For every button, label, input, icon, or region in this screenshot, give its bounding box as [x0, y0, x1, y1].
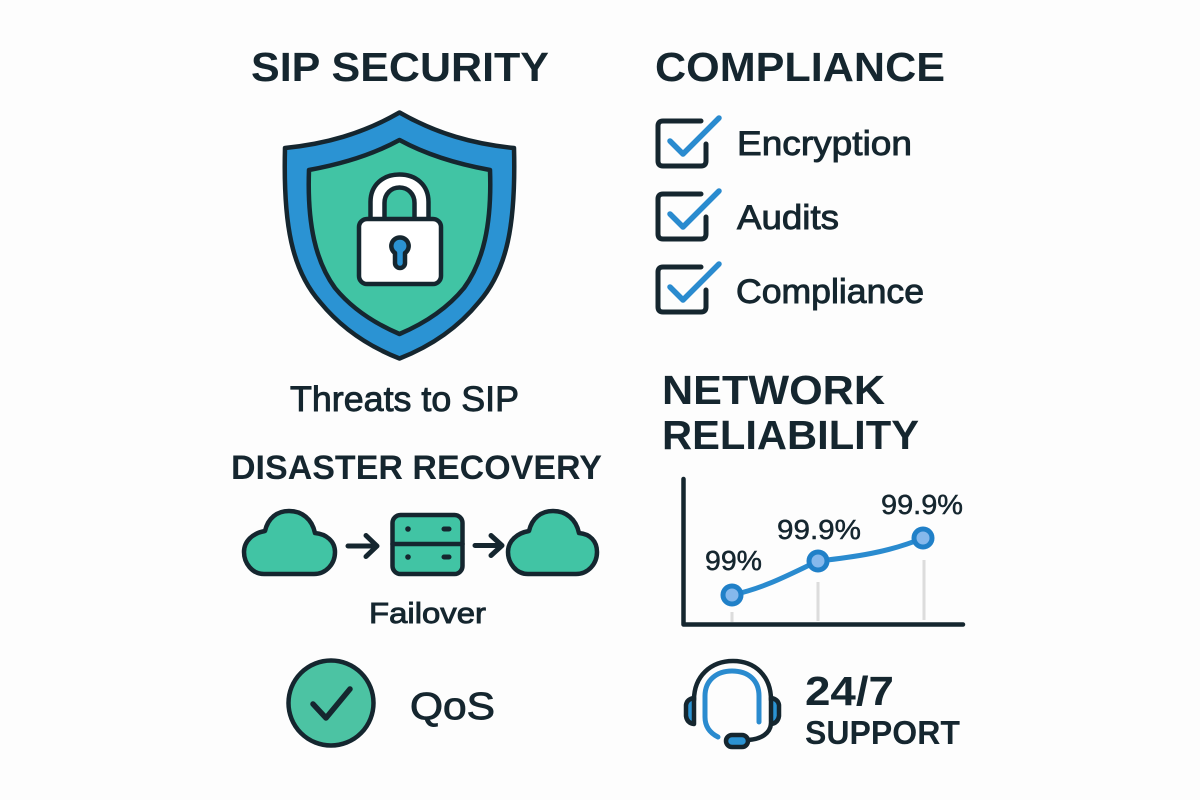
line chart: uptime: 99.9% — [881, 489, 963, 520]
panel: disaster recovery — [231, 449, 602, 630]
heading: Compliance: COMPLIANCE — [655, 44, 945, 90]
label: QoS: QoS — [410, 686, 495, 728]
caption: Threats to SIP: Threats to SIP — [290, 380, 519, 419]
icon: shield with padlock — [285, 112, 514, 358]
line chart: uptime — [684, 479, 963, 624]
arrow: server to cloud — [475, 536, 502, 556]
heading: Network Reliability — [662, 367, 919, 458]
label: 24/7 Support — [805, 668, 960, 751]
line chart: uptime: 99% — [705, 545, 762, 576]
label: 24/7 Support: 24/7 — [805, 668, 894, 714]
checklist item: Compliance — [658, 264, 924, 312]
checklist item: Compliance: Compliance — [736, 273, 924, 311]
icon: server — [392, 515, 462, 574]
checklist item: Audits: Audits — [737, 199, 839, 237]
checklist item: Encryption: Encryption — [737, 125, 912, 163]
panel: SIP security — [251, 44, 549, 419]
heading: Network Reliability: RELIABILITY — [662, 412, 919, 458]
icon: check circle — [288, 660, 374, 746]
line chart: uptime: 99.9% — [777, 514, 861, 545]
checklist item: Encryption — [658, 118, 912, 166]
icon: headset — [686, 661, 779, 747]
panel: network reliability — [662, 367, 963, 624]
icon: target cloud — [508, 511, 597, 574]
icon: source cloud — [244, 511, 335, 574]
caption: Failover: Failover — [369, 598, 486, 630]
heading: Network Reliability: NETWORK — [662, 367, 885, 413]
checklist item: Audits — [658, 191, 839, 239]
label: 24/7 Support: SUPPORT — [805, 714, 960, 751]
heading: SIP Security: SIP SECURITY — [251, 44, 549, 90]
arrow: cloud to server — [348, 536, 377, 556]
panel: 24/7 support — [686, 661, 960, 751]
panel: compliance — [655, 44, 945, 312]
panel: QoS — [288, 660, 495, 746]
heading: Disaster Recovery: DISASTER RECOVERY — [231, 449, 602, 487]
